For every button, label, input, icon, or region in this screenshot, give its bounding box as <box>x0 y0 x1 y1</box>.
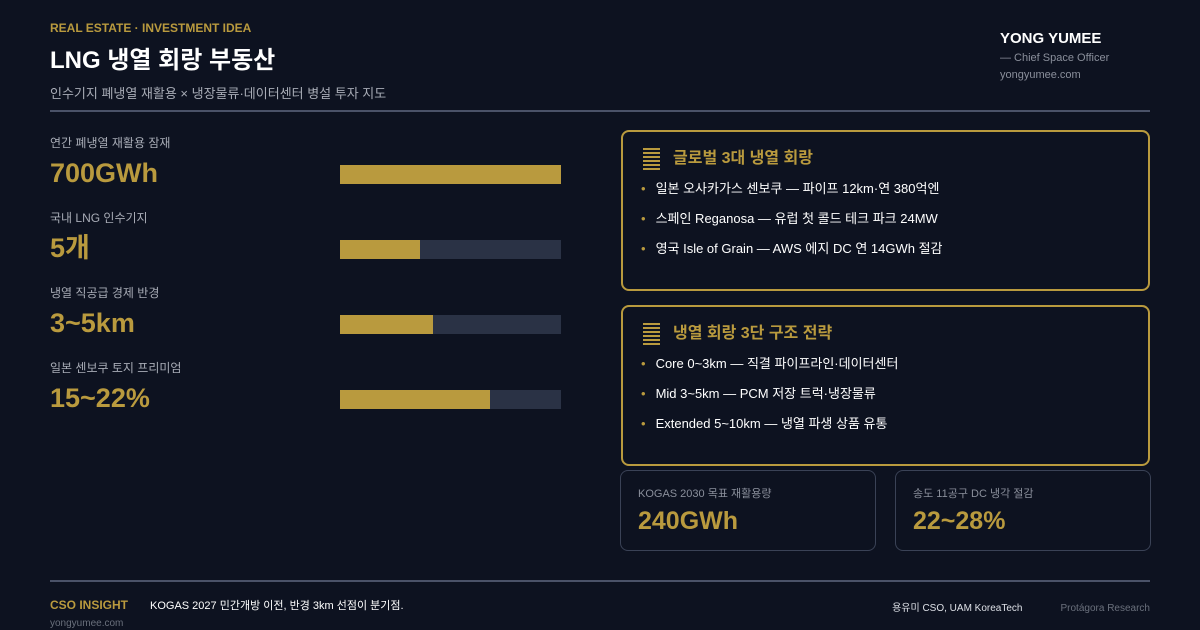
metric: 700GWh: 700GWh <box>50 158 158 188</box>
metric: 15~22%: 일본 센보쿠 토지 프리미엄 <box>50 361 181 375</box>
bar: 700GWh <box>340 165 561 184</box>
panel: global corridors: 영국 Isle of Grain — AWS 에지 DC 연 14GWh 절감 <box>656 241 943 256</box>
card: Songdo: 송도 11공구 DC 냉각 절감 <box>913 488 1034 500</box>
bar: 15~22% <box>340 390 561 409</box>
metric: 3~5km: 냉열 직공급 경제 반경 <box>50 286 159 300</box>
panel: strategy <box>621 305 1150 466</box>
footer: credits: 용유미 CSO, UAM KoreaTech Protágora Research <box>892 603 1150 614</box>
card: KOGAS 2030: KOGAS 2030 목표 재활용량 <box>638 488 771 500</box>
metric: 5개: 국내 LNG 인수기지 <box>50 211 148 225</box>
panel: strategy: Extended 5~10km — 냉열 파생 상품 유통 <box>656 416 887 431</box>
bar: 3~5km <box>340 315 561 334</box>
bar: 5 <box>340 240 561 259</box>
metric: 700GWh: 연간 폐냉열 재활용 잠재 <box>50 136 170 150</box>
panel: global corridors <box>621 130 1150 291</box>
card: Songdo <box>895 470 1151 551</box>
card: KOGAS 2030: 240GWh <box>638 507 738 535</box>
subtitle: 인수기지 폐냉열 재활용 × 냉장물류·데이터센터 병설 투자 지도 <box>50 86 386 101</box>
footer: insight: yongyumee.com <box>50 618 123 629</box>
metric: 5개 <box>50 211 148 263</box>
metric: 5개: 5개 <box>50 233 90 263</box>
author block: YONG YUMEE <box>1000 30 1101 47</box>
heading: 냉열 회랑 3단 구조 전략 <box>673 325 832 342</box>
card: KOGAS 2030 <box>620 470 876 551</box>
author block: yongyumee.com <box>1000 69 1081 81</box>
metric: 3~5km: 3~5km <box>50 308 135 338</box>
footer: insight: CSO INSIGHT <box>50 598 128 612</box>
title: LNG 냉열 회랑 부동산 <box>50 47 275 74</box>
panel: strategy: Mid 3~5km — PCM 저장 트럭·냉장물류 <box>656 386 876 401</box>
panel: strategy: Core 0~3km — 직결 파이프라인·데이터센터 <box>656 356 898 371</box>
metric: 700GWh <box>50 136 170 188</box>
panel: global corridors: 일본 오사카가스 센보쿠 — 파이프 12km·연 380억엔 <box>656 181 939 196</box>
heading: 글로벌 3대 냉열 회랑 <box>673 150 813 167</box>
header: kicker: REAL ESTATE · INVESTMENT IDEA <box>50 21 251 35</box>
metric: 3~5km <box>50 286 159 338</box>
author block: — Chief Space Officer <box>1000 52 1109 64</box>
heading <box>643 323 832 345</box>
panel: global corridors: 스페인 Reganosa — 유럽 첫 콜드 테크 파크 24MW <box>656 211 938 226</box>
metric: 15~22% <box>50 361 181 413</box>
author block <box>1000 30 1110 81</box>
heading <box>643 148 813 170</box>
footer: insight: KOGAS 2027 민간개방 이전, 반경 3km 선점이 분기점. <box>150 600 404 612</box>
metric: 15~22%: 15~22% <box>50 383 150 413</box>
card: Songdo: 22~28% <box>913 507 1005 535</box>
footer: insight <box>50 598 404 629</box>
